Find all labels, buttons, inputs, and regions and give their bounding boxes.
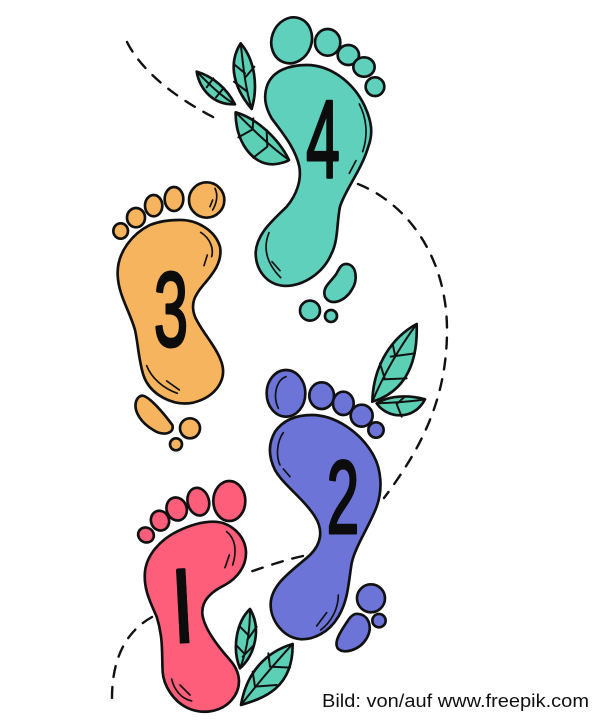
heel pads: [300, 264, 356, 322]
number 4: 4: [306, 78, 340, 201]
sole: [256, 65, 371, 286]
toes: [113, 182, 224, 239]
dashed trail: [112, 42, 447, 698]
sole highlights: [266, 104, 366, 278]
footprint 2: [267, 324, 425, 651]
heel pads: [135, 396, 200, 450]
sole highlights: [147, 232, 212, 393]
leaves beside footprint 1: [236, 609, 293, 705]
image credit: Bild: von/auf www.freepik.com: [322, 691, 589, 711]
sole highlights: [278, 433, 338, 630]
number 1: 1: [155, 547, 208, 666]
toes: [265, 12, 384, 96]
footprint 3: [113, 182, 224, 450]
heel pads: [336, 584, 386, 651]
toe highlight: [210, 188, 217, 210]
toes: [267, 370, 384, 438]
number 2: 2: [327, 439, 359, 555]
sole: [145, 522, 246, 712]
toes: [135, 481, 245, 545]
sole: [118, 220, 223, 403]
sole: [270, 415, 380, 639]
sole highlights: [172, 532, 235, 701]
number 3: 3: [154, 252, 188, 369]
toe highlight: [276, 377, 286, 408]
footprint 1: [135, 481, 293, 712]
leaves beside footprint 4: [197, 43, 289, 164]
leaves beside footprint 2: [372, 324, 425, 417]
footprint 4: [197, 12, 384, 322]
